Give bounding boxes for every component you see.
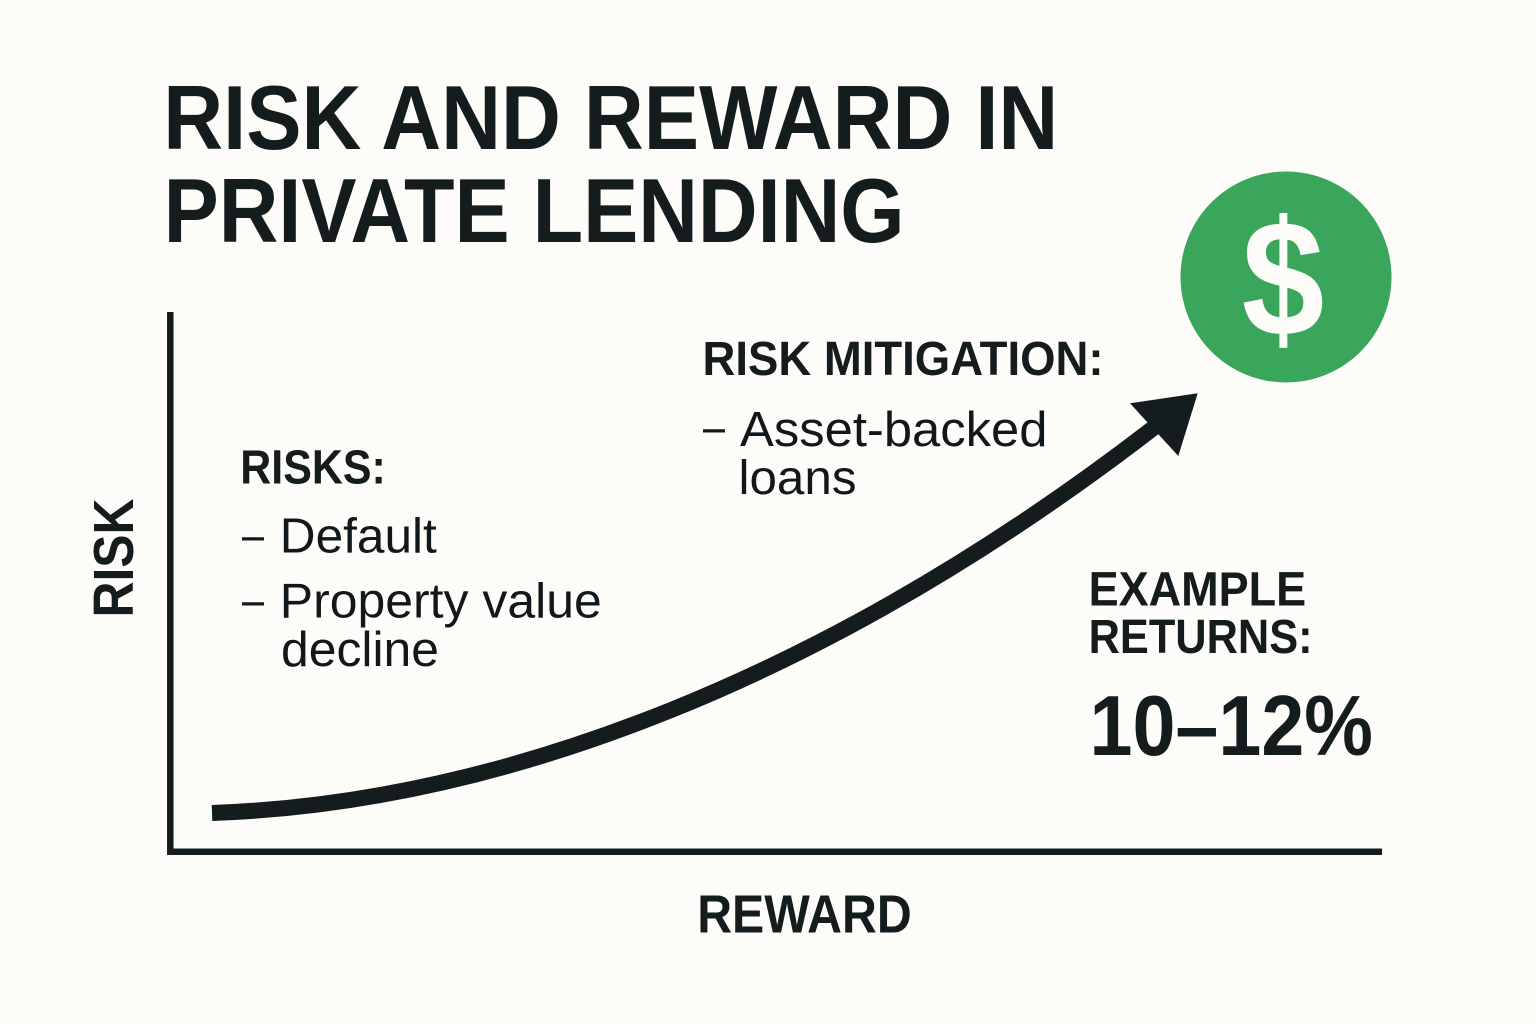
text block: example returns: EXAMPLE xyxy=(1089,564,1306,617)
text block: risks: Property value xyxy=(280,575,602,629)
text block: risks: RISKS: xyxy=(240,441,386,494)
text block: risk mitigation xyxy=(702,332,1104,505)
title: PRIVATE LENDING xyxy=(164,161,905,262)
text block: risk mitigation: loans xyxy=(738,452,856,505)
icon: green dollar coin: $ xyxy=(1242,187,1324,371)
text block: example returns: 10–12% xyxy=(1090,679,1373,774)
title: RISK AND REWARD IN xyxy=(163,68,1058,169)
text block: risks: – xyxy=(242,509,264,562)
text block: risks: – xyxy=(242,574,264,627)
text block: risks: Default xyxy=(280,510,437,564)
title xyxy=(163,68,1058,262)
text block: risks: decline xyxy=(281,623,439,677)
icon: green dollar coin xyxy=(1180,172,1392,382)
y-axis label: RISK xyxy=(82,498,146,618)
text block: risk mitigation: Asset-backed xyxy=(740,403,1048,457)
text block: example returns: RETURNS: xyxy=(1089,611,1313,664)
arrow: rising risk-reward curve xyxy=(212,393,1198,813)
x-axis label: REWARD xyxy=(697,884,912,944)
text block: risks xyxy=(240,441,602,677)
text block: example returns xyxy=(1089,564,1373,774)
text block: risk mitigation: RISK MITIGATION: xyxy=(702,332,1104,386)
chart axes xyxy=(170,312,1382,852)
text block: risk mitigation: – xyxy=(703,401,725,454)
